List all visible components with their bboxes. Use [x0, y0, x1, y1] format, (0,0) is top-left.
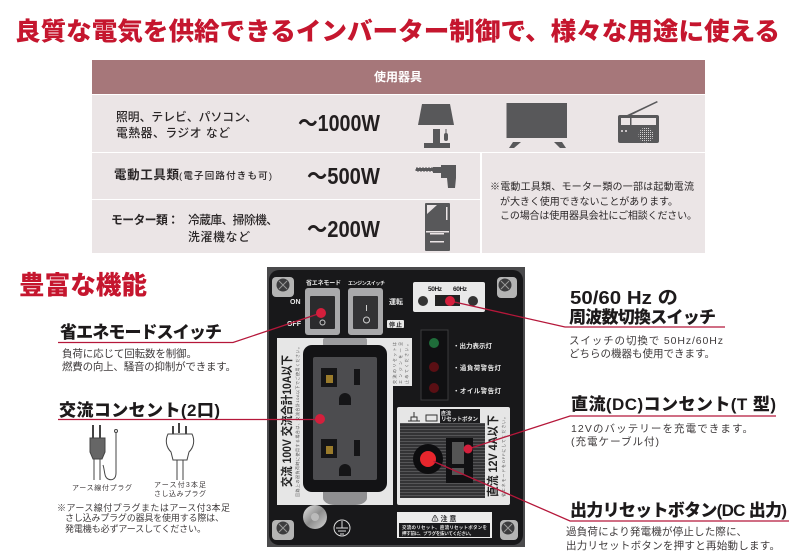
- heading: features: 豊富な機能: [19, 271, 147, 300]
- DC outlet and reset button: リセットボタン: [441, 415, 478, 423]
- table row: up to 200W: モーター類：: [111, 213, 179, 227]
- corner screws: [272, 277, 518, 540]
- callout: reset button: 過負荷により発電機が停止した際に、: [566, 525, 747, 538]
- table row: up to 1000W: [92, 95, 705, 152]
- table row: up to 1000W: ～1000W: [298, 110, 380, 136]
- icon: electric drill: [416, 165, 456, 188]
- table row: up to 200W: 冷蔵庫、掃除機、: [188, 213, 278, 227]
- caution label: 交流のリセット、直流リセットボタンを: [402, 524, 488, 531]
- table row: up to 500W: [92, 153, 480, 199]
- frequency selector switch: 60Hz: [453, 286, 468, 293]
- table note: この場合は使用器具会社にご相談ください。: [500, 209, 697, 222]
- table row: up to 200W: 洗濯機など: [188, 230, 250, 244]
- icon: radio: [618, 101, 659, 143]
- labels above switches: ON: [290, 299, 300, 306]
- labels above switches: 停止: [389, 321, 402, 329]
- table row: up to 200W: ～200W: [307, 216, 380, 242]
- engine switch: [348, 288, 383, 335]
- callout: eco mode switch: [58, 308, 326, 373]
- DC outlet and reset button: 直流: [441, 410, 451, 417]
- caution label: [397, 512, 492, 538]
- panel: usable appliances table: [92, 60, 705, 253]
- table row: up to 500W: 電動工具類: [114, 167, 179, 182]
- AC outlet label and socket: [277, 338, 412, 505]
- labels above switches: 省エネモード: [306, 279, 341, 287]
- callout: DC outlet: (充電ケーブル付): [571, 435, 659, 448]
- table row: up to 1000W: 電熱器、ラジオ など: [116, 126, 230, 140]
- plug labels: アース付3本足: [154, 480, 206, 489]
- callout: eco mode switch: 負荷に応じて回転数を制御。: [62, 347, 197, 360]
- table note: [482, 153, 705, 253]
- table row: up to 200W: [92, 200, 480, 253]
- earth note: [57, 502, 230, 534]
- caution label: 押す前に、プラグを抜いてください。: [402, 530, 474, 537]
- callout: AC outlets: 交流コンセント(2口): [59, 400, 220, 420]
- labels above switches: [287, 279, 404, 329]
- table row: up to 1000W: 照明、テレビ、パソコン、: [116, 110, 257, 124]
- earth note: 発電機も必ずアースしてください。: [65, 523, 206, 534]
- icon: three-pin plug: [166, 423, 194, 480]
- AC outlet label and socket: 交流 100V 交流合計10A以下: [279, 355, 294, 487]
- plug labels: [72, 480, 206, 498]
- table row: up to 500W: ～500W: [307, 163, 380, 189]
- callout: DC outlet: 12Vのバッテリーを充電できます。: [571, 423, 753, 435]
- indicator lamps: ・過負荷警告灯: [453, 363, 502, 372]
- indicator lamps: ・出力表示灯: [453, 341, 492, 350]
- table note: ※電動工具類、モーター類の一部は起動電流: [490, 180, 694, 193]
- callout: frequency switch: 周波数切換スイッチ: [569, 307, 716, 327]
- callout: reset button: [422, 453, 789, 552]
- labels above switches: 運転: [389, 297, 403, 306]
- table header: 使用器具: [374, 69, 422, 84]
- earth note: ※アース線付プラグまたはアース付3本足: [57, 502, 230, 513]
- labels above switches: OFF: [287, 321, 302, 328]
- ground terminal: [303, 505, 350, 536]
- DC outlet and reset button: [397, 407, 510, 505]
- plug labels: さし込みプラグ: [154, 489, 206, 498]
- DC outlet and reset button: 省エネモードをOFFにしてください。: [500, 415, 506, 497]
- AC outlet label and socket: エンジンを一旦: [398, 342, 403, 384]
- callout: frequency switch: [445, 287, 725, 360]
- labels above switches: エンジンスイッチ: [348, 281, 385, 287]
- callout: reset button: 出力リセットボタンを押すと再始動します。: [566, 539, 780, 552]
- table header: [92, 60, 705, 94]
- callout: frequency switch: スイッチの切換で 50Hz/60Hz: [569, 335, 723, 347]
- table note: が大きく使用できないことがあります。: [500, 195, 678, 208]
- DC outlet and reset button: 直流 12V 4A以下: [485, 415, 500, 497]
- callout: eco mode switch: 省エネモードスイッチ: [60, 322, 222, 342]
- callout: AC outlets: [58, 400, 325, 424]
- AC outlet label and socket: 交流のリセットは: [391, 342, 397, 384]
- frequency selector switch: [413, 282, 485, 312]
- callout: DC outlet: [464, 394, 776, 454]
- AC outlet label and socket: 止めてください。: [403, 342, 409, 384]
- title: 良質な電気を供給できるインバーター制御で、様々な用途に使える: [15, 17, 780, 46]
- callout: frequency switch: どちらの機器も使用できます。: [569, 347, 715, 360]
- table row: up to 500W: (電子回路付きも可): [179, 170, 272, 182]
- panel: generator control panel: [267, 267, 525, 547]
- icon: lamp: [418, 104, 454, 148]
- earth note: さし込みプラグの器具を使用する際は、: [65, 512, 224, 523]
- callout: frequency switch: 50/60 Hz の: [570, 287, 678, 308]
- plug labels: アース線付プラグ: [72, 483, 132, 492]
- icon: earth-wire plug: [90, 425, 118, 480]
- caution label: ⚠ 注 意: [432, 514, 456, 523]
- icon: refrigerator: [425, 203, 450, 251]
- indicator lamps: [421, 330, 502, 400]
- callout: DC outlet: 直流(DC)コンセント(T 型): [571, 394, 776, 414]
- eco mode switch: [305, 288, 340, 335]
- indicator lamps: ・オイル警告灯: [453, 386, 502, 395]
- frequency selector switch: 50Hz: [428, 286, 443, 293]
- callout: eco mode switch: 燃費の向上、騒音の抑制ができます。: [62, 360, 236, 373]
- icon: television: [506, 103, 567, 148]
- callout: reset button: 出力リセットボタン(DC 出力): [570, 500, 787, 520]
- AC outlet label and socket: 回路上の過負荷時に使用する場合は、交流合計10A以下でご使用ください。: [294, 345, 300, 497]
